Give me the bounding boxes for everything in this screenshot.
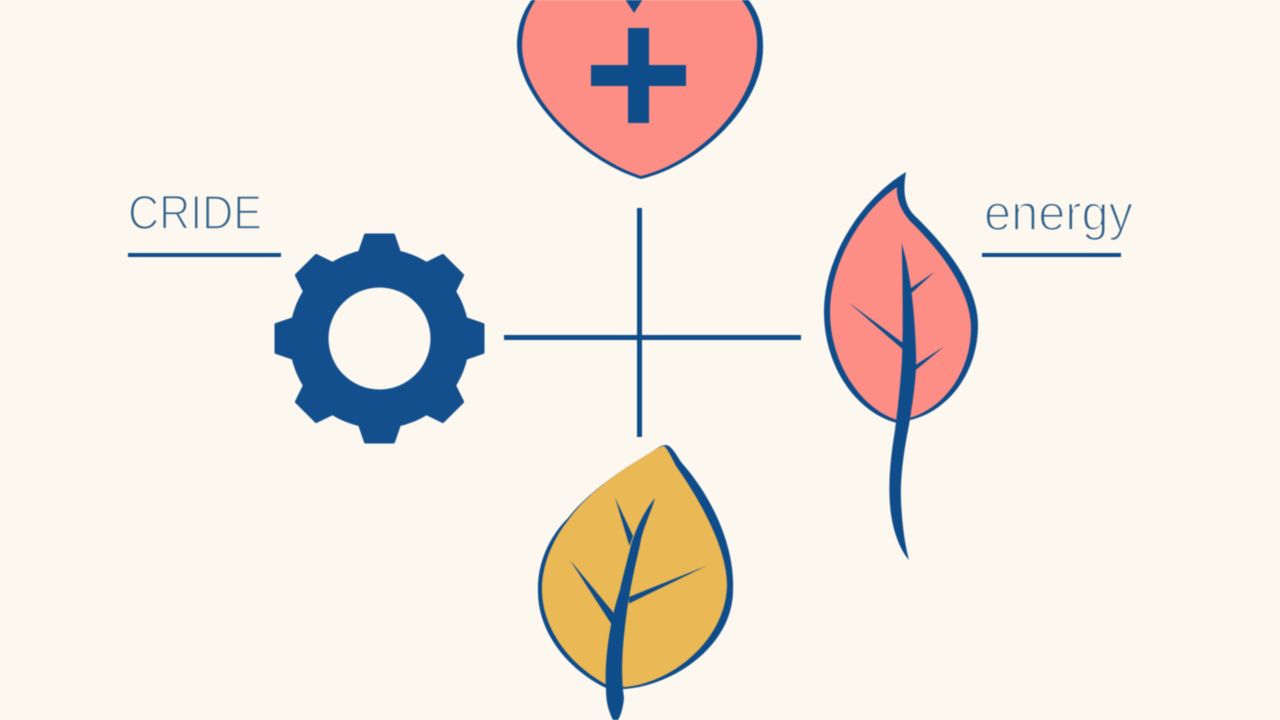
icon: heart with plus xyxy=(517,0,763,179)
label: CRIDE: CRIDE xyxy=(128,187,262,240)
icon: yellow leaf xyxy=(538,445,733,720)
icon: gear xyxy=(276,235,483,442)
label: energy: energy xyxy=(984,185,1133,241)
icon: coral leaf xyxy=(824,172,978,560)
central cross lines xyxy=(504,208,801,437)
